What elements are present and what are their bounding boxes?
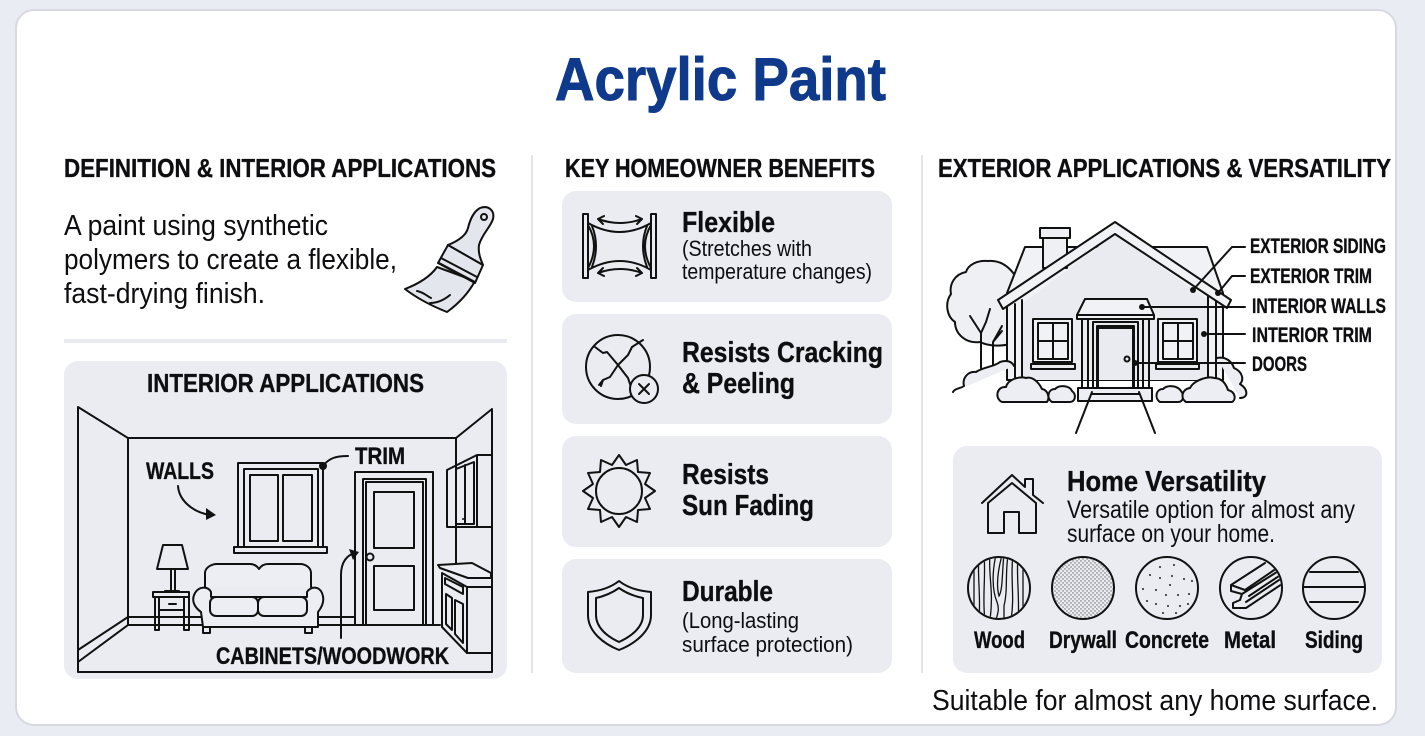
caption: Suitable for almost any home surface.	[932, 685, 1378, 717]
definition text: fast-drying finish.	[64, 278, 265, 310]
surface: wood	[968, 555, 1030, 654]
room illustration	[78, 407, 492, 672]
sofa	[193, 564, 323, 633]
tree	[947, 261, 1016, 368]
text: resists cracking and peeling: Resists Cracking	[682, 337, 883, 369]
card: flexible	[562, 191, 892, 302]
text: flexible: (Stretches with	[682, 236, 812, 261]
door	[355, 472, 433, 624]
text: home versatility: Home Versatility	[1067, 466, 1266, 498]
surface: concrete: Concrete	[1125, 627, 1209, 654]
label: trim with leader	[319, 443, 405, 470]
heading: interior applications: INTERIOR APPLICATIONS	[147, 368, 424, 398]
window	[234, 463, 327, 553]
base cabinet	[438, 563, 491, 653]
panel: interior applications	[64, 361, 507, 679]
leader lines and labels: DOORS	[1252, 353, 1307, 376]
divider	[64, 339, 507, 343]
main roof	[998, 222, 1231, 309]
text: resists sun fading	[682, 459, 814, 522]
label: cabinets and woodwork with arrow: CABINETS/WOODWORK	[216, 643, 450, 670]
label: walls with arrow: WALLS	[146, 458, 214, 485]
heading: definition and interior applications: DEFINITION & INTERIOR APPLICATIONS	[64, 153, 496, 183]
text: durable: surface protection)	[682, 632, 853, 657]
right window	[1156, 319, 1199, 369]
definition text	[64, 210, 397, 310]
text: resists sun fading: Sun Fading	[682, 490, 814, 522]
leader lines and labels	[1132, 235, 1386, 376]
porch and door	[1076, 299, 1155, 433]
leader lines and labels: EXTERIOR TRIM	[1250, 265, 1372, 288]
house illustration	[947, 222, 1386, 433]
surface: concrete	[1125, 557, 1209, 654]
text: flexible	[682, 207, 872, 284]
wall cabinet	[447, 455, 491, 527]
icon: paint brush	[405, 207, 493, 312]
surface: metal	[1220, 557, 1285, 654]
text: home versatility: Versatile option for almost any	[1067, 496, 1355, 524]
chimney	[1040, 228, 1070, 268]
label: cabinets and woodwork with arrow	[216, 549, 450, 670]
text: durable: Durable	[682, 576, 773, 608]
icon: house	[982, 475, 1043, 533]
surface: drywall: Drywall	[1049, 627, 1117, 654]
panel: home versatility	[953, 446, 1382, 673]
text: home versatility: surface on your home.	[1067, 520, 1275, 548]
bushes	[953, 358, 1246, 402]
surface: metal: Metal	[1224, 627, 1276, 654]
label: walls with arrow	[146, 458, 216, 520]
definition text: A paint using synthetic	[64, 210, 328, 242]
text: home versatility	[1067, 466, 1355, 548]
text: durable: (Long-lasting	[682, 608, 799, 633]
leader lines and labels: INTERIOR TRIM	[1252, 324, 1372, 347]
surface: wood: Wood	[974, 627, 1025, 654]
heading: key homeowner benefits: KEY HOMEOWNER BENEFITS	[565, 153, 875, 183]
back roof	[1007, 247, 1223, 380]
text: flexible: temperature changes)	[682, 259, 872, 284]
surface: siding	[1303, 557, 1365, 654]
text: resists sun fading: Resists	[682, 459, 769, 491]
icon: sun	[583, 455, 655, 527]
text: resists cracking and peeling: & Peeling	[682, 368, 795, 400]
title: Acrylic Paint	[555, 46, 886, 113]
card: resists cracking and peeling	[562, 314, 892, 424]
icon: flexible stretch	[583, 214, 656, 278]
lamp and table	[153, 545, 189, 630]
icon: cracked surface	[586, 335, 658, 403]
label: trim with leader: TRIM	[355, 443, 405, 470]
panel: key homeowner benefits	[562, 153, 892, 673]
text: resists cracking and peeling	[682, 337, 883, 400]
text: flexible: Flexible	[682, 207, 775, 239]
surface: drywall	[1049, 557, 1117, 654]
left window	[1031, 319, 1075, 369]
panel: definition and interior applications	[64, 153, 507, 679]
card: durable	[562, 559, 892, 673]
surface: siding: Siding	[1305, 627, 1363, 654]
icon: shield	[588, 581, 651, 650]
definition text: polymers to create a flexible,	[64, 244, 397, 276]
column divider	[531, 155, 533, 673]
panel: exterior applications and versatility	[932, 153, 1391, 717]
text: durable	[682, 576, 853, 657]
column divider	[921, 155, 923, 673]
house front wall	[1022, 234, 1208, 380]
card: resists sun fading	[562, 436, 892, 547]
